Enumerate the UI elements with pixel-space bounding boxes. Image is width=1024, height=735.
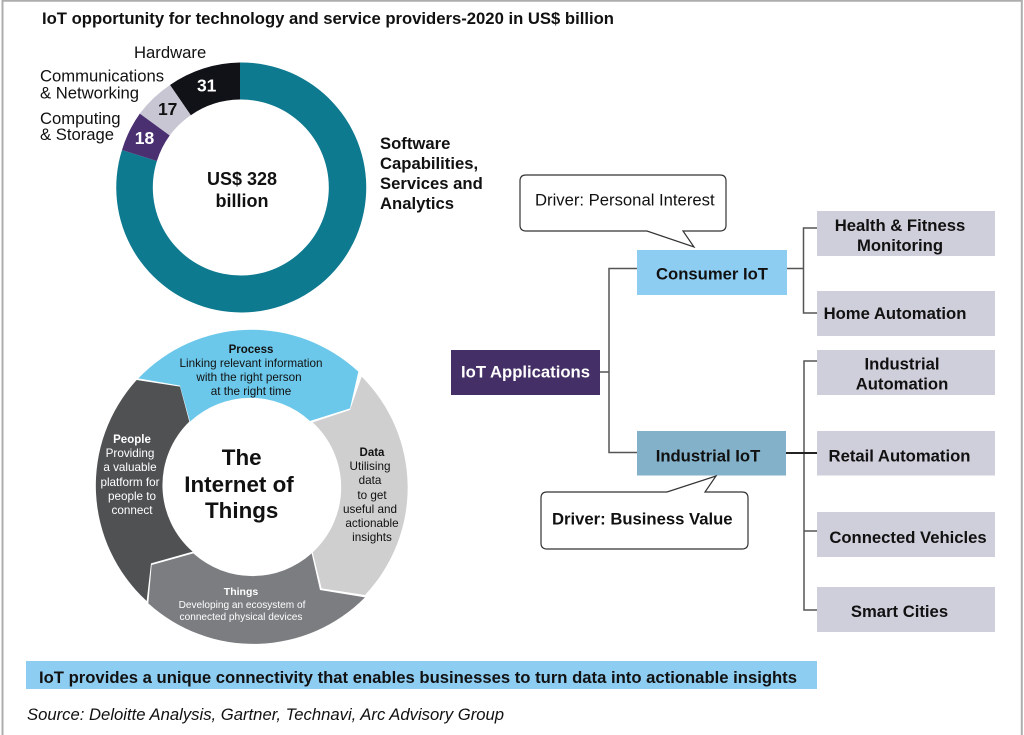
label: hardware: Hardware (134, 43, 206, 62)
box: iot applications (451, 350, 600, 395)
donut centre total: billion (216, 191, 268, 211)
label: computing: & Storage (40, 125, 114, 144)
box: smart cities (817, 587, 995, 632)
box: retail automation: Retail Automation (829, 446, 970, 466)
box: home automation (817, 291, 995, 336)
callout: business value: Driver: Business Value (552, 510, 733, 528)
data text: actionable (345, 517, 399, 530)
callout: personal interest: Driver: Personal Interest (535, 190, 715, 210)
callout: business value (541, 476, 748, 549)
callout: personal interest (520, 175, 726, 247)
takeaway band (26, 661, 817, 689)
segment: software (116, 62, 366, 312)
box: consumer iot (637, 250, 787, 295)
data text: to get (357, 489, 387, 502)
box: health and fitness (817, 211, 995, 256)
box: industrial automation: Industrial (865, 354, 939, 374)
value 17: 17 (158, 99, 177, 119)
box: smart cities: Smart Cities (851, 602, 948, 621)
label: software: Analytics (380, 194, 454, 213)
segment shapes (96, 330, 408, 644)
people text: platform for (100, 476, 160, 489)
box: connected vehicles (817, 512, 995, 557)
label: computing: Computing (40, 109, 121, 128)
box: home automation: Home Automation (824, 304, 966, 323)
segment: hardware (170, 62, 240, 115)
takeaway band: IoT provides a unique connectivity that enables businesses to turn data into actionable insights (39, 668, 797, 687)
box: health and fitness: Monitoring (857, 236, 943, 255)
box: connected vehicles: Connected Vehicles (829, 528, 987, 547)
people text: a valuable (103, 461, 157, 474)
data text: useful and (343, 503, 397, 516)
people text: Providing (106, 447, 154, 460)
box: consumer iot: Consumer IoT (656, 264, 768, 284)
donut chart (40, 43, 483, 312)
things text: Things (224, 586, 258, 598)
internet of things cycle (96, 330, 408, 644)
box: retail automation (817, 431, 995, 476)
value 31: 31 (197, 76, 217, 96)
process text: with the right person (195, 371, 302, 384)
data text: data (359, 474, 382, 487)
centre title: The (222, 445, 262, 470)
segment: computing (122, 114, 170, 161)
segment: process (138, 330, 358, 422)
things text: connected physical devices (180, 612, 302, 623)
data text: Utilising (350, 460, 390, 473)
box: industrial automation: Automation (856, 374, 948, 394)
label: communications: Communications (40, 66, 164, 86)
label: software: Services and (380, 174, 483, 193)
process text: Linking relevant information (180, 357, 322, 370)
segment: things (148, 553, 365, 644)
centre title: Things (205, 498, 278, 523)
box: health and fitness: Health & Fitness (835, 216, 965, 235)
box: industrial automation (817, 350, 995, 395)
data text: insights (352, 531, 392, 544)
box: industrial iot: Industrial IoT (656, 446, 760, 466)
value 18: 18 (135, 128, 154, 148)
donut centre total: US$ 328 (207, 169, 277, 189)
segment: people (96, 380, 193, 601)
label: software: Capabilities, (380, 154, 478, 173)
segment: communications (140, 85, 191, 136)
segment: data (313, 377, 408, 595)
people text: People (113, 434, 151, 446)
people text: connect (112, 504, 153, 517)
box: iot applications: IoT Applications (461, 362, 590, 382)
centre title: Internet of (184, 472, 294, 497)
process text: at the right time (211, 385, 291, 398)
things text: Developing an ecosystem of (179, 600, 306, 611)
label: communications: & Networking (40, 84, 139, 102)
people text: people to (108, 490, 157, 503)
connector lines (600, 228, 817, 610)
box: industrial iot (637, 431, 786, 476)
process text: Process (229, 344, 273, 356)
source note: Source: Deloitte Analysis, Gartner, Technavi, Arc Advisory Group (27, 705, 504, 724)
label: software: Software (380, 134, 450, 153)
data text: Data (360, 447, 385, 459)
title: IoT opportunity for technology and service providers-2020 in US$ billion (42, 9, 614, 28)
